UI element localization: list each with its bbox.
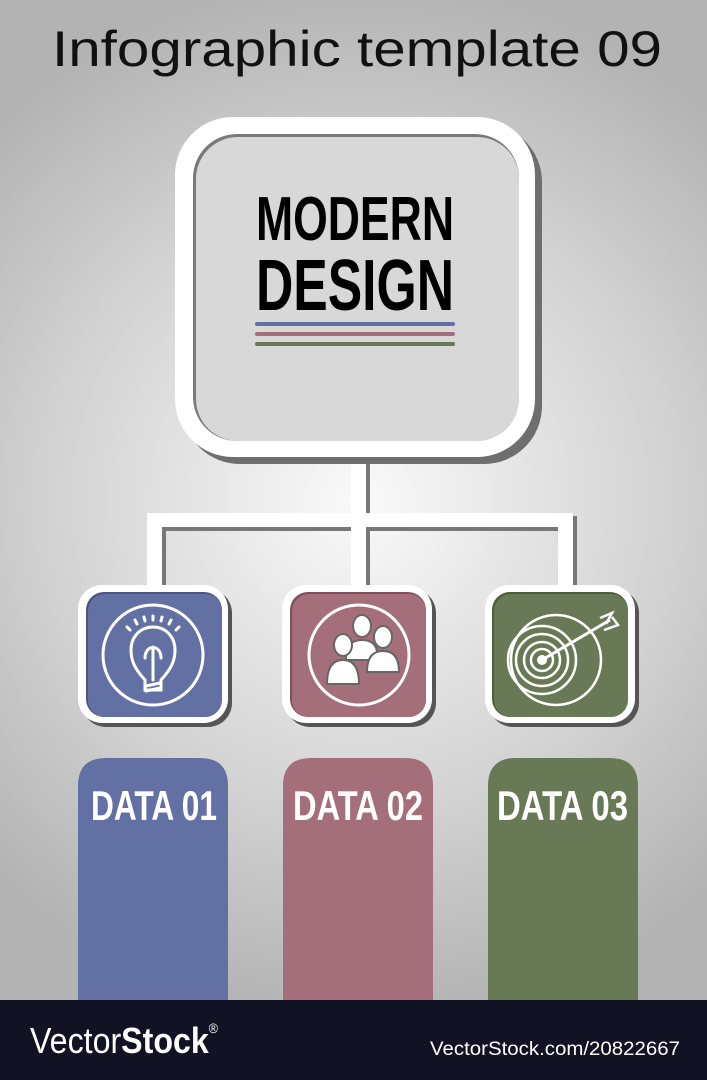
heading: modern design: DESIGN: [256, 246, 454, 326]
icon box: target: [485, 585, 639, 727]
footer: [0, 1000, 707, 1080]
data column 03: [488, 758, 638, 1000]
data column 01: DATA 01: [91, 782, 217, 829]
icon box: lightbulb: [78, 585, 232, 727]
data column 03: DATA 03: [497, 782, 628, 829]
footer: ®: [209, 1020, 219, 1036]
panel: modern design main box: [175, 117, 542, 464]
footer: VectorStock: [30, 1020, 219, 1061]
footer: VectorStock.com/20822667: [430, 1039, 680, 1060]
heading: modern design: MODERN: [256, 185, 454, 254]
connector lines: [147, 450, 577, 588]
color underlines: [257, 324, 453, 344]
title: Infographic template 09: [52, 21, 662, 77]
data column 01: [78, 758, 228, 1000]
data column 02: [283, 758, 433, 1000]
heading: modern design: [256, 185, 454, 326]
data column 02: DATA 02: [293, 782, 423, 829]
icon box: people: [282, 585, 436, 727]
